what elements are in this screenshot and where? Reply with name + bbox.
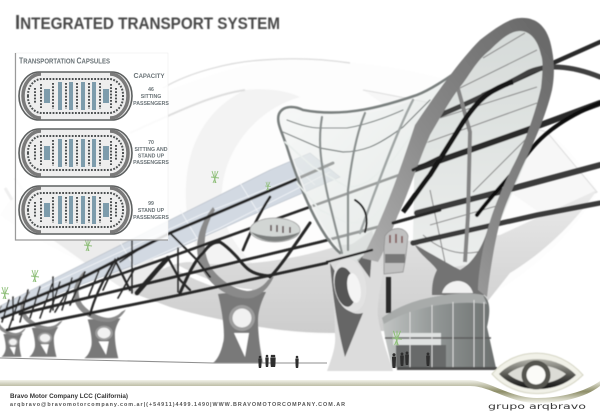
footer band <box>0 380 600 403</box>
capsule 70 mixed <box>19 129 132 177</box>
logo eye <box>492 353 583 394</box>
capacity 99: STAND UP <box>138 208 165 214</box>
capacity 46 <box>133 87 169 107</box>
front beams <box>327 157 440 262</box>
support column <box>386 277 391 313</box>
capsule 99 standing <box>19 186 132 234</box>
small pillar 2 <box>20 291 63 357</box>
passenger capsule left <box>250 218 300 242</box>
people by building <box>392 351 430 368</box>
main grey arch <box>362 18 554 297</box>
rear beams <box>413 42 600 243</box>
capsule 46 seats <box>19 72 132 120</box>
passenger capsule station <box>384 228 408 274</box>
logo text: grupo arqbravo <box>488 402 587 411</box>
capacity 99 <box>133 201 169 221</box>
contact line: arqbravo@bravomotorcompany.com.ar|(+54911)4499.1490|WWW.BRAVOMOTORCOMPANY.COM.AR <box>10 402 345 408</box>
front canopy glass <box>278 68 462 262</box>
capacity 70: SITTING AND <box>135 147 168 153</box>
background eye watermark <box>0 59 598 335</box>
capacity 46: PASSENGERS <box>133 101 169 107</box>
panel: transportation capsules <box>15 53 169 240</box>
canopy frame and lattice <box>278 68 462 253</box>
capacity 99: PASSENGERS <box>133 215 169 221</box>
capacity heading: CAPACITY <box>134 73 164 80</box>
small pillar 1 <box>0 305 26 357</box>
solar panel roof strip <box>0 153 340 318</box>
back pillar <box>415 226 497 295</box>
truss beams <box>0 157 440 330</box>
pillar 4 <box>197 207 274 363</box>
capacity 70: STAND UP <box>138 154 165 160</box>
front pillar <box>327 230 393 371</box>
capacity 46: SITTING <box>141 94 161 100</box>
capacity 70: 70 <box>148 140 154 146</box>
small pillar 3 <box>73 271 126 358</box>
capacity 46: 46 <box>148 87 154 93</box>
capacity 70: PASSENGERS <box>133 160 169 166</box>
panel heading: TRANSPORTATION CAPSULES <box>19 56 110 66</box>
capacity 99: 99 <box>148 201 154 207</box>
company name: Bravo Motor Company LCC (California) <box>10 393 128 400</box>
ground <box>0 358 327 363</box>
dark diagonal curve <box>403 82 513 212</box>
green leaf icons <box>1 171 402 345</box>
inner back strut <box>457 85 470 262</box>
capacity 70 <box>133 140 169 166</box>
title: INTEGRATED TRANSPORT SYSTEM <box>15 12 280 34</box>
back canopy lattice <box>420 33 537 262</box>
people left group <box>258 355 299 368</box>
back canopy glass <box>413 20 552 268</box>
building <box>382 293 497 370</box>
